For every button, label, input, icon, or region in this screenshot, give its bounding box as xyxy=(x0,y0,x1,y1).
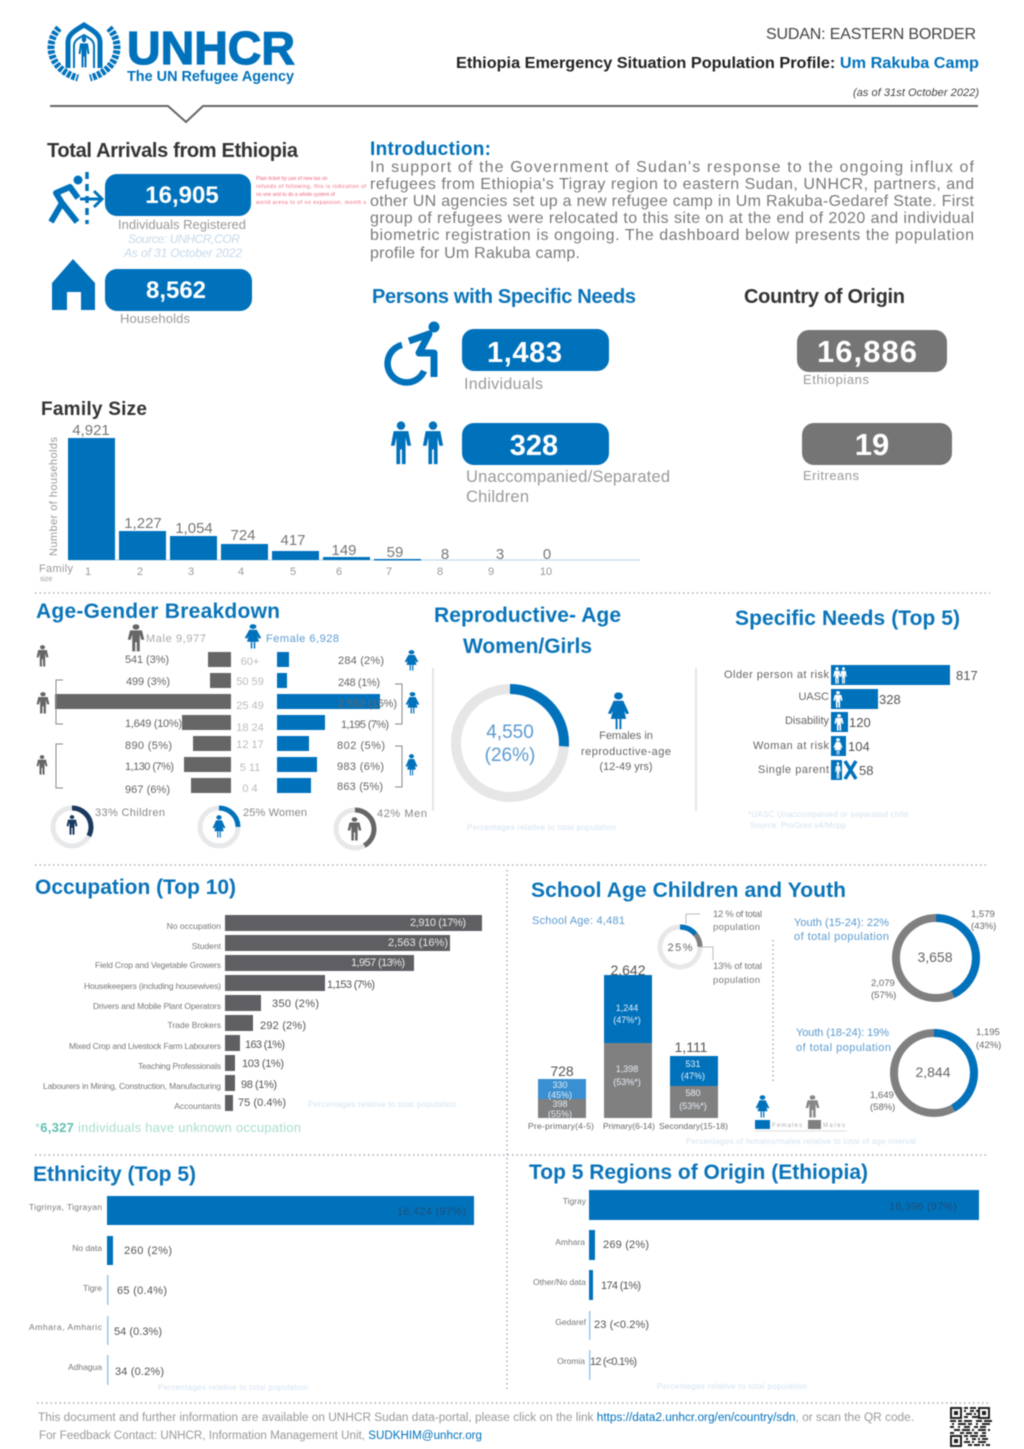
legend: male xyxy=(128,624,206,651)
footnote: Source: ProGres v4/Mopp xyxy=(750,821,847,830)
bar chart: Drivers and Mobile Plant Operators xyxy=(93,1001,221,1011)
school age total: School Age: 4,481 xyxy=(532,915,625,927)
stacked bar chart: 330 xyxy=(552,1080,568,1090)
stat: households xyxy=(105,269,252,326)
heading: Ethnicity (Top 5) xyxy=(33,1163,196,1186)
data portal note: This document and further information are available on UNHCR Sudan data-portal, please click on the link https://data2.unhcr.org/en/country/sdn , or scan the QR code. xyxy=(38,1412,914,1424)
bar chart: Other/No data xyxy=(533,1277,586,1287)
bar chart: Adhagua xyxy=(68,1362,102,1372)
donut chart xyxy=(456,689,564,797)
bar chart: 98 (1%) xyxy=(241,1079,277,1091)
bar chart: Trade Brokers xyxy=(167,1020,221,1030)
tagline: The UN Refugee Agency xyxy=(127,68,295,85)
male values xyxy=(125,654,185,796)
stacked bar chart: (53%*) xyxy=(679,1101,707,1111)
icon: children xyxy=(391,421,443,464)
panel: top 5 regions of origin xyxy=(529,1161,979,1391)
donut: share of population xyxy=(660,909,762,986)
age labels: 60+ xyxy=(241,656,259,668)
legend: female: Female 6,928 xyxy=(266,633,339,645)
bar chart: 350 (2%) xyxy=(272,998,319,1010)
body text: biometric registration is ongoing. The dashboard below presents the population xyxy=(370,227,974,244)
footnote: Percentages relative to total population xyxy=(467,823,616,832)
male values: 1,130 (7%) xyxy=(125,761,174,773)
panel: ethnicity top 5 xyxy=(29,1163,474,1392)
bar chart: 174 (1%) xyxy=(601,1280,641,1292)
body text: refugees from Ethiopia's Tigray region to eastern Sudan, UNHCR, partners, and xyxy=(370,176,974,193)
bar chart: 292 (2%) xyxy=(260,1020,306,1032)
bar chart: 12 (<0.1%) xyxy=(590,1356,637,1368)
bar chart: Labourers in Mining, Construction, Manufacturing xyxy=(43,1081,221,1091)
female values: 2,553 (15%) xyxy=(338,698,397,710)
caption: reproductive-age xyxy=(581,746,671,758)
heading: Occupation (Top 10) xyxy=(35,876,236,899)
stat: individuals xyxy=(462,329,609,393)
bar chart: 260 (2%) xyxy=(124,1245,172,1257)
panel: age-gender breakdown xyxy=(36,600,427,848)
stacked bar chart: Pre-primary(4-5) xyxy=(528,1121,594,1131)
bar chart: Family xyxy=(39,563,74,575)
bar chart: 3 xyxy=(188,566,194,578)
bar chart: Student xyxy=(192,941,222,951)
stat: unaccompanied children: Children xyxy=(466,488,529,506)
bar chart: 163 (1%) xyxy=(245,1039,285,1051)
bar chart: Accountants xyxy=(174,1101,221,1111)
bar chart: 3 xyxy=(496,546,504,563)
female values: 248 (1%) xyxy=(338,677,380,689)
heading: Top 5 Regions of Origin (Ethiopia) xyxy=(529,1161,868,1184)
donut: share of population: population xyxy=(713,975,760,986)
bar chart: Tigrinya, Tigrayan xyxy=(29,1202,102,1212)
stat: Ethiopians: Ethiopians xyxy=(803,372,870,387)
header rule with notch xyxy=(50,106,978,122)
bar chart: 269 (2%) xyxy=(603,1239,649,1251)
bar chart: 65 (0.4%) xyxy=(117,1285,167,1297)
bar chart: Single parent xyxy=(758,764,829,776)
body text: group of refugees were relocated to this site on at the end of 2020 and individual xyxy=(370,210,974,227)
donut: share of population: 25% xyxy=(668,942,693,954)
report title: Ethiopia Emergency Situation Population Profile: Um Rakuba Camp xyxy=(456,55,979,72)
stacked bar chart: 580 xyxy=(685,1088,701,1098)
donut: youth 15-24: (43%) xyxy=(971,921,996,932)
wordmark: UNHCR xyxy=(127,22,295,74)
QR code xyxy=(950,1407,992,1447)
donut: youth 18-24: (42%) xyxy=(976,1040,1001,1051)
footnote: Percentages relative to total population xyxy=(308,1100,456,1109)
bar chart: 16,424 (97%) xyxy=(397,1206,466,1218)
age labels: 50 59 xyxy=(236,676,264,688)
stat: individuals registered xyxy=(105,174,251,260)
bar chart: Housekeepers (including housewives) xyxy=(84,981,221,991)
stat: individuals registered: Source: UNHCR,COR xyxy=(128,232,240,246)
bar chart: 120 xyxy=(849,715,871,730)
bar chart: Disability xyxy=(785,715,829,727)
donut: youth 18-24: of total population xyxy=(796,1042,891,1054)
note: red annotation: Plain ticket by use of new tax on xyxy=(256,176,328,182)
footnote: Percentages of females/males relative to total of age interval xyxy=(686,1137,916,1146)
donut: youth 18-24: Youth (18-24): 19% xyxy=(796,1027,889,1039)
donut: youth 15-24: 2,079 xyxy=(871,978,895,989)
panel: specific needs top 5 xyxy=(724,607,978,830)
age labels: 0 4 xyxy=(242,783,258,795)
stacked bar chart: 2,642 xyxy=(610,962,646,978)
bar chart xyxy=(29,1196,474,1385)
bar chart: 4 xyxy=(238,566,244,578)
bar chart: 34 (0.2%) xyxy=(115,1366,164,1378)
bar chart: 8 xyxy=(437,566,443,578)
heading second line: Women/Girls xyxy=(463,635,592,658)
donut: women xyxy=(200,807,307,846)
stacked bar chart: (53%*) xyxy=(613,1077,641,1087)
bar chart: UASC xyxy=(798,691,829,703)
female values: 284 (2%) xyxy=(338,655,384,667)
body text: profile for Um Rakuba camp. xyxy=(370,245,580,262)
bar chart: 149 xyxy=(331,542,357,559)
panel: persons with specific needs xyxy=(372,286,670,506)
note: red annotation: no one and to do a whole system of xyxy=(256,192,336,198)
stacked bar chart: Secondary(15-18) xyxy=(659,1121,728,1131)
bar chart: 6 xyxy=(336,566,342,578)
stacked bar chart: 1,244 xyxy=(616,1003,638,1013)
header xyxy=(50,22,979,122)
stacked bar chart: 531 xyxy=(685,1059,701,1069)
bar chart: 1,957 (13%) xyxy=(351,957,405,969)
heading: Introduction: xyxy=(370,139,491,160)
footnote xyxy=(748,810,908,830)
bar chart: 328 xyxy=(879,692,901,707)
bar chart: 2,563 (16%) xyxy=(388,937,448,949)
heading: Country of Origin xyxy=(744,286,905,308)
bar chart: 16,396 (97%) xyxy=(889,1201,957,1213)
footnote: *UASC Unaccompanied or separated child xyxy=(748,810,908,819)
stat: Ethiopians: 16,886 xyxy=(817,334,917,369)
note: red annotation: refunds of following, this is indication of xyxy=(256,184,367,190)
bar chart: 75 (0.4%) xyxy=(238,1097,286,1109)
heading: Persons with Specific Needs xyxy=(372,286,636,308)
donut: youth 18-24: 1,195 xyxy=(976,1027,1000,1038)
stat: Eritreans: 19 xyxy=(855,427,889,462)
bar chart: 1,227 xyxy=(124,515,162,532)
icon: person crossing border xyxy=(51,172,102,224)
bar chart: Tigre xyxy=(83,1283,102,1293)
stat: unaccompanied children: 328 xyxy=(510,430,558,462)
bar chart: 2,910 (17%) xyxy=(410,917,466,929)
stat: households: Households xyxy=(120,311,190,326)
female bars xyxy=(277,652,380,793)
bar chart: Woman at risk xyxy=(753,740,830,752)
stacked bar chart: 1,111 xyxy=(675,1039,708,1055)
age labels: 18 24 xyxy=(236,722,264,734)
bar chart: 0 xyxy=(543,546,551,563)
heading: Specific Needs (Top 5) xyxy=(735,607,960,630)
donut: men xyxy=(336,808,427,848)
body text xyxy=(370,159,975,262)
bar chart: 103 (1%) xyxy=(242,1058,284,1070)
legend: females and males: Males xyxy=(823,1123,845,1129)
stacked bar chart: 398 xyxy=(552,1099,568,1109)
stat: individuals: 1,483 xyxy=(487,337,562,369)
panel: country of origin xyxy=(744,286,952,483)
bar chart xyxy=(533,1190,979,1380)
axis title: Number of households xyxy=(48,436,60,556)
donut chart: 4,550 xyxy=(486,722,534,743)
stat: unaccompanied children: Unaccompanied/Separated xyxy=(466,468,670,486)
age labels: 5 11 xyxy=(240,762,260,774)
stat: households: 8,562 xyxy=(146,277,206,304)
caption xyxy=(581,730,671,773)
female values: 863 (5%) xyxy=(337,781,383,793)
donut: youth 15-24: 1,579 xyxy=(971,909,995,920)
bar chart xyxy=(724,665,978,780)
bar chart: 54 (0.3%) xyxy=(114,1326,162,1338)
icon: wheelchair user xyxy=(388,322,440,382)
heading: Age-Gender Breakdown xyxy=(36,600,280,623)
bar chart xyxy=(43,915,482,1111)
bar chart: 7 xyxy=(386,566,392,578)
stacked bar chart: (47%) xyxy=(681,1071,705,1081)
icon: house xyxy=(52,259,95,310)
report date: (as of 31st October 2022) xyxy=(853,87,979,99)
legend: male: Male 9,977 xyxy=(146,633,206,645)
footnote: Percentages relative to total population xyxy=(657,1382,807,1391)
age labels: 12 17 xyxy=(236,739,264,751)
bar chart: Older person at risk xyxy=(724,669,830,681)
caption: (12-49 yrs) xyxy=(599,761,653,773)
stacked bar chart: (47%*) xyxy=(613,1015,641,1025)
stacked bar chart: (45%) xyxy=(548,1090,572,1100)
donut: youth 18-24: (58%) xyxy=(870,1102,895,1113)
chart: population pyramid xyxy=(55,652,402,796)
donut: youth 15-24: Youth (15-24): 22% xyxy=(794,917,889,929)
female values xyxy=(337,655,397,793)
stat: individuals registered: Individuals Registered xyxy=(118,217,246,232)
heading: School Age Children and Youth xyxy=(531,879,846,902)
caption: Females in xyxy=(599,730,653,742)
donut: children xyxy=(53,807,165,846)
male values: 541 (3%) xyxy=(125,654,169,666)
bar chart: No occupation xyxy=(167,921,221,931)
bar chart: Gedaref xyxy=(555,1317,587,1327)
bar chart: 1 xyxy=(85,566,91,578)
bar chart: 1,054 xyxy=(175,520,213,537)
bar chart: 817 xyxy=(956,668,978,683)
bar chart: 58 xyxy=(859,763,873,778)
stacked bar chart: (55%) xyxy=(548,1109,572,1119)
stat: individuals: Individuals xyxy=(464,376,543,393)
donut chart: (26%) xyxy=(485,745,535,766)
icon: wreath and sheltering hands xyxy=(51,25,117,78)
note: red annotation xyxy=(256,176,367,206)
panel: total arrivals xyxy=(47,140,367,326)
bar chart: Amhara, Amharic xyxy=(29,1322,103,1332)
bar chart: 59 xyxy=(387,544,403,561)
donut: share of population: 13% of total xyxy=(713,961,762,972)
bar chart xyxy=(39,422,640,583)
stacked bar chart: 728 xyxy=(550,1063,574,1079)
bar chart: Tigray xyxy=(563,1196,587,1206)
bar chart: 104 xyxy=(848,739,870,754)
donut: children: 33% Children xyxy=(95,807,165,819)
icon: pregnant woman xyxy=(608,692,629,729)
bar chart: size xyxy=(40,576,53,583)
donut: youth 18-24: 1,649 xyxy=(870,1090,894,1101)
note: red annotation: world arena to of no expansion, month s xyxy=(256,200,366,206)
legend: females and males xyxy=(755,1095,847,1131)
bar chart: 4,921 xyxy=(72,422,110,439)
feedback contact: For Feedback Contact: UNHCR, Information Management Unit, SUDKHIM@unhcr.org xyxy=(39,1430,482,1442)
female values: 802 (5%) xyxy=(337,740,385,752)
heading: Family Size xyxy=(41,399,147,420)
bar chart: Amhara xyxy=(555,1237,585,1247)
donut: share of population: 12 % of total xyxy=(713,909,762,920)
bar chart: 5 xyxy=(290,566,296,578)
donut: youth 15-24: (57%) xyxy=(871,990,896,1001)
panel: occupation top 10 xyxy=(35,876,482,1135)
donut: men: 42% Men xyxy=(377,808,427,820)
stat: unaccompanied children xyxy=(462,423,670,506)
stat: individuals registered: 16,905 xyxy=(145,182,219,209)
bar chart: Mixed Crop and Livestock Farm Labourers xyxy=(69,1041,221,1051)
donut: youth 15-24: 3,658 xyxy=(917,949,953,965)
bar chart: 23 (<0.2%) xyxy=(594,1319,649,1331)
bar chart: Oromia xyxy=(557,1356,585,1366)
panel: reproductive-age women and girls xyxy=(434,604,671,832)
footer xyxy=(38,1407,992,1447)
brackets xyxy=(56,680,402,788)
note: unknown occupation: *6,327 individuals have unknown occupation xyxy=(35,1120,301,1135)
logo: UNHCR emblem and wordmark xyxy=(51,22,295,85)
stacked bar chart xyxy=(528,962,728,1131)
bar chart: 2 xyxy=(137,566,143,578)
donut: youth 18-24: 2,844 xyxy=(915,1064,951,1080)
bar chart: 417 xyxy=(280,532,306,549)
panel: introduction xyxy=(370,139,975,262)
male bars xyxy=(55,652,231,793)
heading: Total Arrivals from Ethiopia xyxy=(47,140,299,162)
female values: 1,195 (7%) xyxy=(341,719,389,731)
donut: share of population: population xyxy=(713,922,760,933)
footnote: Percentages relative to total population xyxy=(158,1383,308,1392)
bar chart: Teaching Professionals xyxy=(138,1061,221,1071)
stat: individuals registered: As of 31 October 2022 xyxy=(123,246,242,260)
legend: females and males: Females xyxy=(772,1123,802,1129)
body text: other UN agencies set up a new refugee camp in Um Rakuba-Gedaref State. First xyxy=(370,193,975,210)
donut: youth 18-24 xyxy=(796,1027,1001,1113)
bar chart: Field Crop and Vegetable Growers xyxy=(95,960,221,970)
bar chart: 9 xyxy=(488,566,494,578)
stat: Ethiopians xyxy=(797,330,947,387)
bar chart: No data xyxy=(72,1243,102,1253)
stacked bar chart: Primary(6-14) xyxy=(603,1121,655,1131)
icons: age groups xyxy=(36,645,419,776)
legend: female xyxy=(245,624,339,648)
bar chart: 1,153 (7%) xyxy=(327,979,375,991)
location heading: SUDAN: EASTERN BORDER xyxy=(766,26,976,43)
age labels xyxy=(236,656,264,795)
bar chart: 10 xyxy=(540,566,552,578)
bar chart: 724 xyxy=(230,527,256,544)
stat: Eritreans: Eritreans xyxy=(803,468,860,483)
heading: Reproductive- Age xyxy=(434,604,621,627)
donut: youth 15-24 xyxy=(794,909,996,1001)
panel: family size xyxy=(39,399,640,583)
body text: In support of the Government of Sudan's response to the ongoing influx of xyxy=(370,159,975,176)
age labels: 25 49 xyxy=(236,700,264,712)
bar chart: 8 xyxy=(441,546,449,563)
stacked bar chart: 1,398 xyxy=(616,1064,638,1074)
male values: 890 (5%) xyxy=(125,740,172,752)
male values: 4,301 (25%) xyxy=(126,697,185,709)
female values: 983 (6%) xyxy=(337,761,384,773)
stat: Eritreans xyxy=(802,423,952,483)
donut: youth 15-24: of total population xyxy=(794,931,889,943)
donut: women: 25% Women xyxy=(243,807,307,819)
panel: school age children and youth xyxy=(528,879,1001,1146)
male values: 967 (6%) xyxy=(125,784,170,796)
male values: 1,649 (10%) xyxy=(125,718,182,730)
male values: 499 (3%) xyxy=(126,676,170,688)
